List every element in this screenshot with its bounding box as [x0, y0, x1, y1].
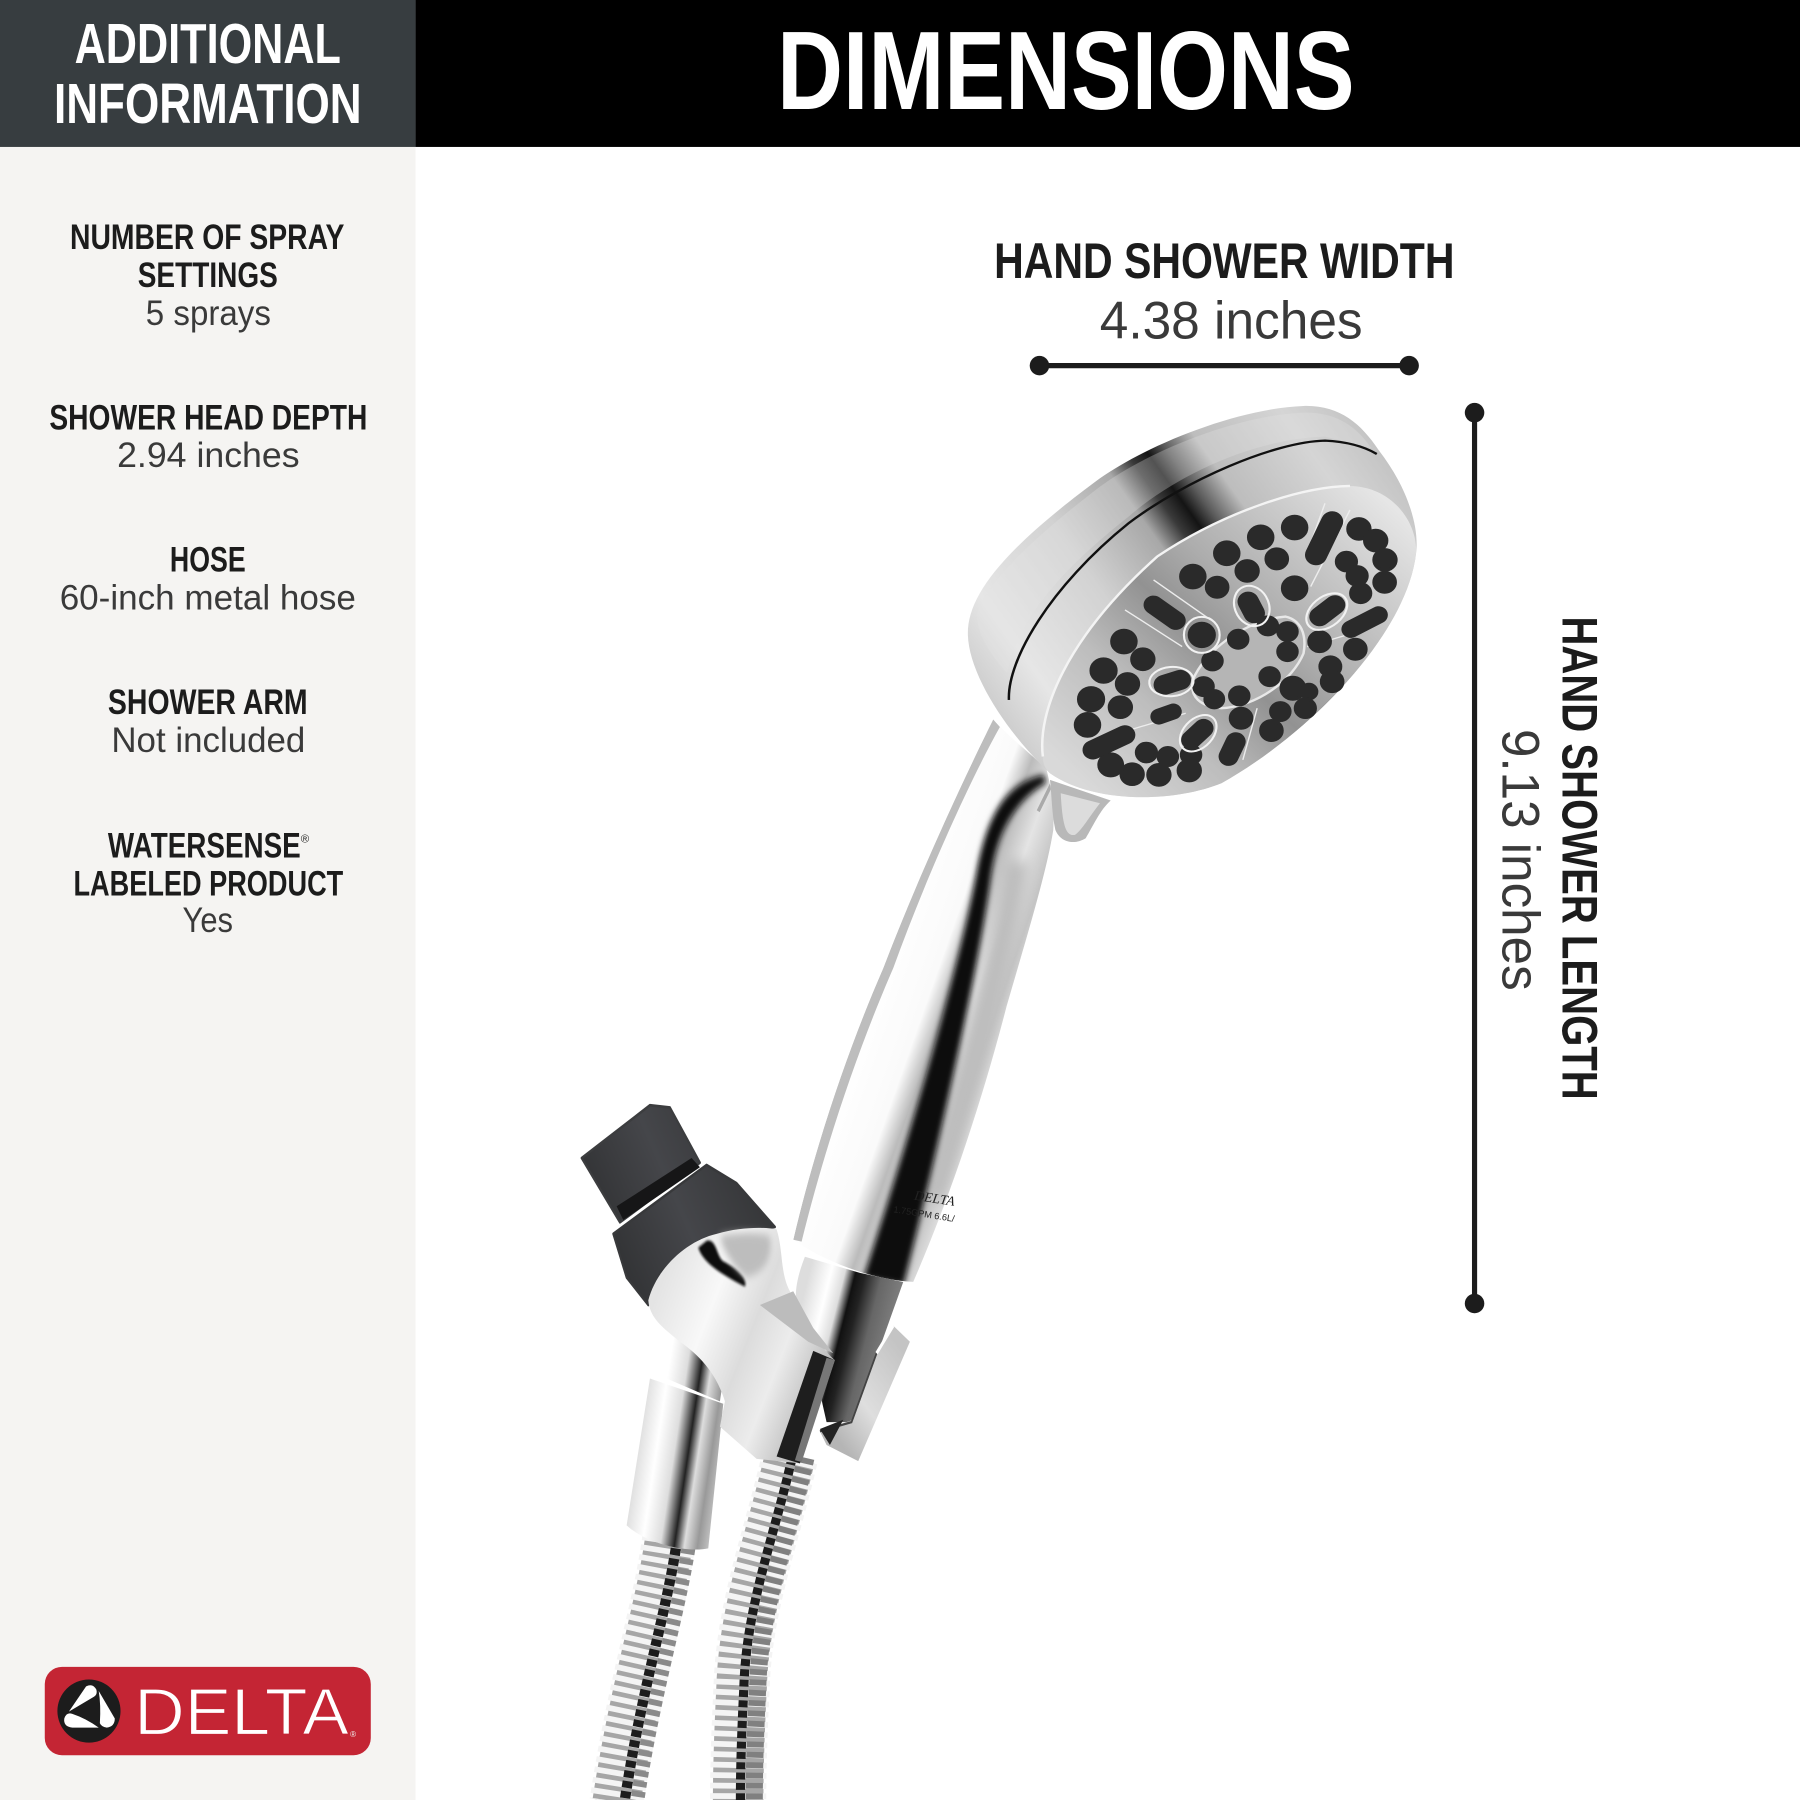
delta logo: DELTA	[134, 1676, 349, 1749]
bracket shading	[720, 1233, 771, 1277]
head body	[968, 406, 1417, 797]
width dimension line	[1030, 356, 1419, 375]
spec: watersense labeled product: Yes	[183, 900, 233, 940]
spec: watersense labeled product: WATERSENSE	[108, 826, 301, 866]
handle	[793, 719, 1054, 1286]
spray lever	[1050, 780, 1111, 842]
spec: number of spray settings: 5 sprays	[146, 293, 271, 333]
face wedge lines	[1086, 503, 1364, 760]
width label: 4.38 inches	[1100, 292, 1363, 351]
spec: shower head depth: 2.94 inches	[117, 435, 300, 475]
spec: watersense labeled product: LABELED PRODUCT	[73, 863, 343, 903]
pipe connector	[667, 1333, 723, 1401]
length dimension line	[1465, 403, 1484, 1313]
width label: HAND SHOWER WIDTH	[994, 232, 1454, 289]
face rim highlight	[1042, 486, 1350, 757]
shower head	[968, 406, 1417, 797]
elongated nozzles	[1093, 522, 1379, 757]
spec: number of spray settings: SETTINGS	[138, 255, 278, 295]
swivel nut	[613, 1165, 775, 1305]
right metal hose	[738, 1458, 806, 1800]
panel: dimensions header bar	[416, 0, 1800, 147]
delta logo: ®	[350, 1730, 356, 1739]
delta logo	[45, 1667, 371, 1755]
panel: additional information sidebar	[0, 0, 416, 1800]
mount	[582, 1105, 835, 1463]
handle printed marking: DELTA	[912, 1188, 957, 1209]
length label: 9.13 inches	[1491, 729, 1550, 991]
face reflections	[1192, 617, 1304, 708]
spec: hose	[60, 540, 356, 618]
bracket notch	[760, 1291, 833, 1353]
bracket reflection	[698, 1241, 745, 1287]
spec: hose: HOSE	[170, 540, 246, 580]
round nozzles	[1075, 516, 1396, 785]
spec: shower arm: Not included	[111, 720, 305, 760]
length label	[1491, 616, 1608, 1100]
spec: number of spray settings: NUMBER OF SPRAY	[70, 217, 345, 257]
width label	[994, 232, 1454, 351]
spray face	[1042, 486, 1416, 797]
panel: dimensions header bar: DIMENSIONS	[777, 8, 1355, 133]
hose clip	[820, 1326, 910, 1461]
spec: shower arm	[108, 682, 308, 760]
handle neck	[796, 1257, 903, 1422]
spec: shower head depth	[49, 397, 367, 475]
neck, clip and ferrule	[627, 1257, 910, 1550]
seam line	[1009, 441, 1377, 700]
handle printed marking: 1.75GPM 6.6L/	[893, 1204, 956, 1224]
spec: shower arm: SHOWER ARM	[108, 682, 308, 722]
spec: watersense labeled product: ®	[301, 834, 310, 846]
sidebar header: INFORMATION	[54, 72, 362, 135]
dark band	[617, 1158, 700, 1220]
sidebar header: ADDITIONAL	[75, 12, 341, 75]
product photo: hand shower	[582, 406, 1417, 1800]
left metal hose	[616, 1538, 690, 1800]
adjustment cap	[582, 1105, 700, 1222]
spec: hose: 60-inch metal hose	[60, 578, 356, 618]
bracket facet	[777, 1351, 835, 1463]
sidebar header	[0, 0, 416, 147]
handle printed marking	[893, 1188, 957, 1224]
hose ferrule	[627, 1378, 723, 1550]
chrome bracket	[648, 1228, 835, 1463]
nozzle chrome rims	[1148, 581, 1355, 758]
spec: watersense labeled product	[73, 826, 343, 940]
spec: shower head depth: SHOWER HEAD DEPTH	[49, 397, 367, 437]
length label: HAND SHOWER LENGTH	[1551, 616, 1608, 1100]
top rim highlight	[977, 413, 1371, 673]
spec: number of spray settings	[70, 217, 345, 333]
